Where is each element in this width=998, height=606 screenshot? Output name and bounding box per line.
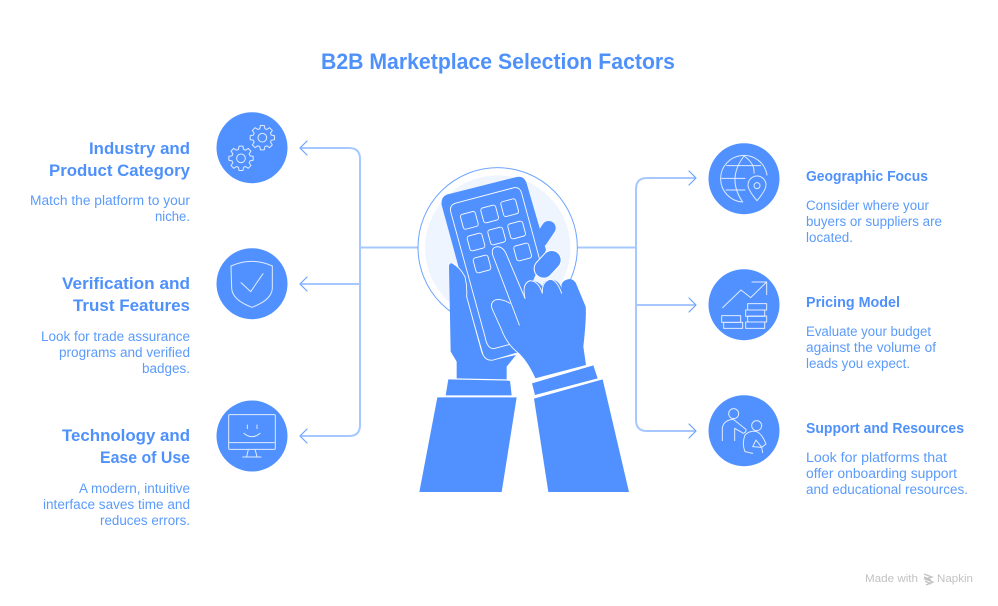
phone (442, 177, 546, 360)
title: B2B Marketplace Selection Factors (321, 49, 675, 74)
description: leads you expect. (806, 356, 910, 371)
left hand (449, 263, 516, 379)
panel: technology and ease of use (43, 400, 288, 528)
watermark (865, 573, 973, 585)
heading: Verification and (62, 274, 190, 293)
fingertip behind phone (541, 228, 549, 240)
panel: industry and product category (30, 112, 288, 224)
description: Consider where your (806, 198, 930, 213)
heading: Trust Features (73, 296, 190, 315)
watermark: Made with (865, 573, 918, 585)
left connector tree (300, 141, 418, 443)
heading: Ease of Use (100, 448, 190, 467)
heading: Industry and (89, 139, 190, 158)
description: offer onboarding support (806, 466, 957, 481)
heading: Pricing Model (806, 295, 900, 311)
description: Match the platform to your (30, 193, 191, 208)
description: Look for platforms that (806, 450, 947, 465)
watermark: Napkin (937, 573, 973, 585)
description: and educational resources. (806, 482, 968, 497)
raised fingertip (544, 260, 552, 269)
description (806, 324, 936, 371)
description: Look for trade assurance (41, 329, 190, 344)
heading: Geographic Focus (806, 169, 928, 185)
icon: globe with pin (708, 143, 780, 214)
icon: shield (216, 248, 288, 319)
description: buyers or suppliers are (806, 214, 942, 229)
description: niche. (155, 209, 190, 224)
description: located. (806, 230, 853, 245)
panel: geographic focus (708, 143, 942, 245)
left cuff and sleeve (419, 379, 517, 492)
description: badges. (142, 361, 190, 376)
heading (49, 139, 191, 180)
heading (62, 426, 190, 467)
heading: Technology and (62, 426, 190, 445)
icon: people helping (708, 395, 780, 466)
icon: gears (216, 112, 288, 183)
panel: pricing model (708, 269, 936, 371)
description: reduces errors. (100, 513, 190, 528)
description (806, 450, 968, 497)
central illustration: hands holding a phone (418, 168, 629, 492)
right hand (491, 247, 586, 378)
description (806, 198, 942, 245)
description: A modern, intuitive (79, 481, 190, 496)
heading: Support and Resources (806, 421, 964, 437)
description: programs and verified (59, 345, 190, 360)
description (43, 481, 190, 528)
icon: growth chart and coins (708, 269, 780, 340)
panel: support and resources (708, 395, 968, 497)
heading: Product Category (49, 161, 191, 180)
description: interface saves time and (43, 497, 190, 512)
background circle (418, 168, 577, 327)
description (30, 193, 191, 224)
icon: smiling monitor (216, 400, 288, 472)
description: Evaluate your budget (806, 324, 931, 339)
panel: verification and trust features (41, 248, 288, 376)
description (41, 329, 190, 376)
right connector tree (577, 171, 696, 438)
heading (62, 274, 190, 315)
description: against the volume of (806, 340, 936, 355)
right cuff and sleeve (532, 365, 629, 492)
